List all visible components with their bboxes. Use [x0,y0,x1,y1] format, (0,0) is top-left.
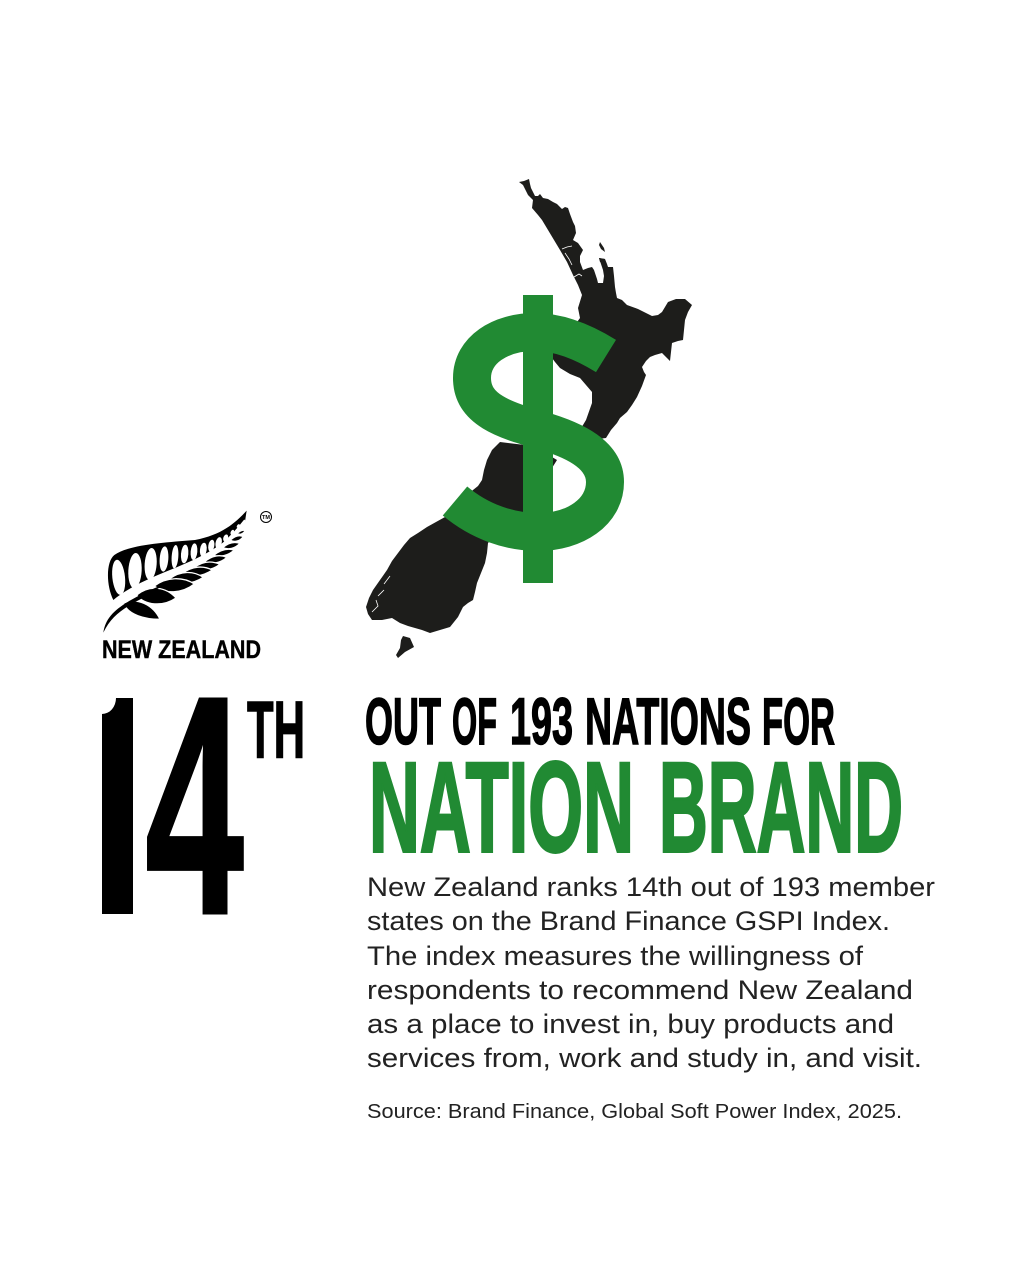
body paragraph: services from, work and study in, and visit. [367,1043,922,1073]
heading [365,684,903,880]
decorative coast inlets [372,246,582,612]
body paragraph [367,872,935,1073]
heading line: nation brand: NATION [369,736,634,880]
ordinal suffix: TH [247,686,305,776]
heading line: out of 193 nations for: 193 [510,684,573,758]
big rank number: 1 [41,629,183,981]
heading line: out of 193 nations for: OF [452,684,497,758]
heading line: out of 193 nations for: NATIONS [585,684,751,758]
heading line: out of 193 nations for [365,684,835,758]
body paragraph: respondents to recommend New Zealand [367,975,913,1005]
body paragraph: as a place to invest in, buy products and [367,1009,894,1039]
heading line: out of 193 nations for: FOR [762,684,835,758]
logo wordmark: NEW ZEALAND [102,636,261,664]
icon: trademark mark [260,512,272,522]
source note: Source: Brand Finance, Global Soft Power Index, 2025. [367,1100,902,1123]
heading line: out of 193 nations for: OUT [365,684,441,758]
icon: trademark mark: TM [262,515,270,521]
body paragraph: The index measures the willingness of [367,941,864,971]
body paragraph: states on the Brand Finance GSPI Index. [367,906,890,936]
icon: green dollar sign [455,295,606,583]
icon: silver fern [103,511,247,633]
logo: silver fern New Zealand [102,511,272,664]
body paragraph: New Zealand ranks 14th out of 193 member [367,872,935,902]
big rank number [102,698,302,914]
big rank number: 4 [145,631,245,979]
icon: map of New Zealand [366,179,692,658]
